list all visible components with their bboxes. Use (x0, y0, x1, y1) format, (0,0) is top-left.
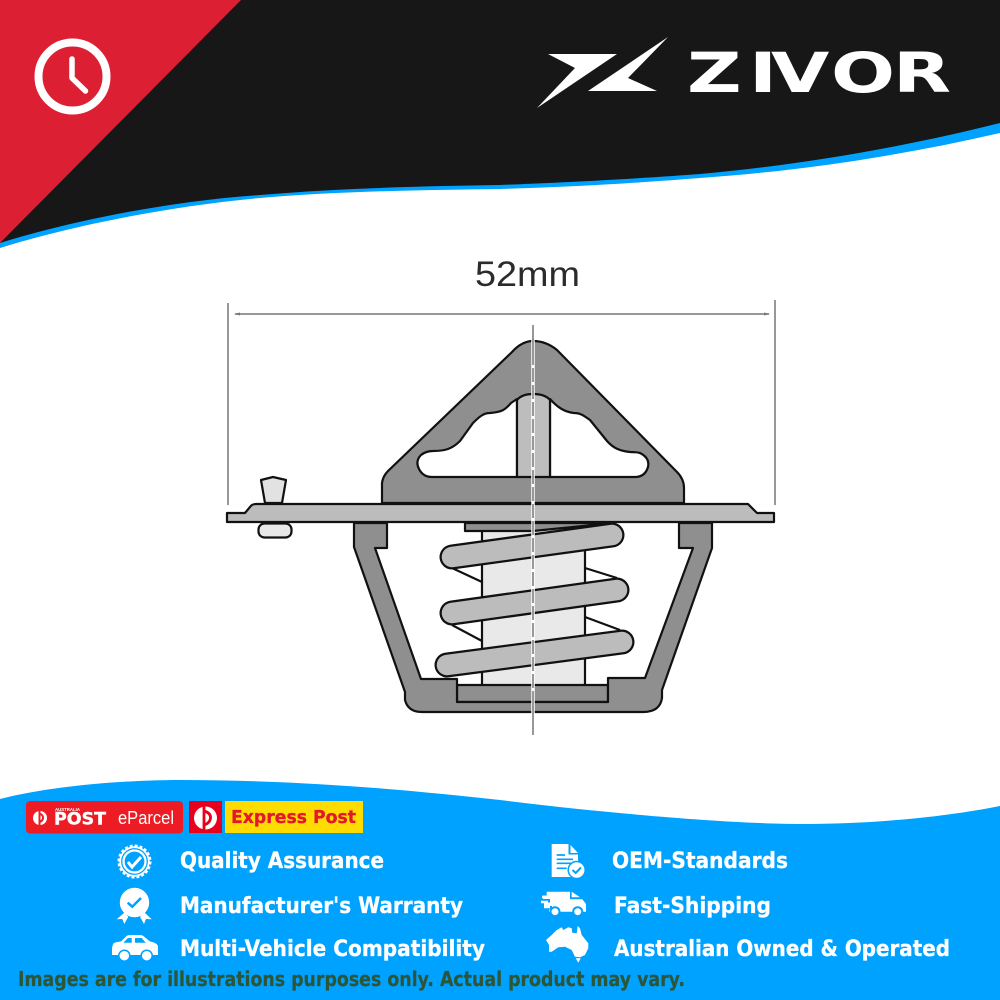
thermostat cup (354, 523, 712, 712)
badge: Australia Post eParcel (26, 801, 183, 834)
bottom plate (457, 685, 608, 702)
logo wordmark: ZIVOR (687, 41, 951, 105)
label: Manufacturer's Warranty: Manufacturer's Warranty (180, 894, 463, 919)
icon: Australia map (546, 926, 588, 963)
thermostat stem (517, 394, 550, 477)
label: OEM-Standards: OEM-Standards (612, 849, 788, 874)
spring back lines (452, 568, 620, 641)
icon: warranty ribbon (117, 888, 152, 924)
badge: Express Post (189, 801, 363, 833)
piston (482, 528, 585, 686)
icon: quality badge (118, 846, 150, 878)
dimension: 52mm (228, 255, 775, 505)
thermostat bridge (382, 341, 684, 503)
piston cap (465, 523, 613, 531)
dimension label: 52mm (475, 255, 580, 294)
badge: Australia Post eParcel: eParcel (118, 807, 174, 828)
label: Australian Owned & Operated: Australian Owned & Operated (614, 937, 950, 962)
rivet bottom (258, 524, 292, 538)
badge: Express Post: Express Post (231, 807, 356, 828)
logo mark (537, 37, 668, 108)
logo: ZIVOR (537, 37, 951, 108)
icon: car (112, 935, 158, 961)
spring coils (447, 535, 622, 665)
post logo (33, 811, 47, 825)
icon: delivery truck (541, 892, 586, 916)
icon: document check (552, 844, 585, 878)
red corner triangle (0, 0, 241, 243)
label: Quality Assurance: Quality Assurance (180, 849, 384, 874)
diagram: thermostat cross-section (227, 341, 774, 712)
label: Fast-Shipping: Fast-Shipping (614, 894, 771, 919)
disclaimer: Images are for illustrations purposes only. Actual product may vary. (18, 967, 685, 991)
label: Multi-Vehicle Compatibility: Multi-Vehicle Compatibility (180, 937, 485, 962)
rivet top (261, 477, 286, 503)
icon: clock (38, 42, 106, 110)
centre line (531, 325, 535, 735)
badge: Australia Post eParcel: AUSTRALIA (55, 807, 81, 812)
footer: blue band (0, 780, 1000, 1000)
header: black banner with blue edge (0, 0, 1000, 248)
thermostat flange (227, 504, 774, 522)
badge: Australia Post eParcel: POST (54, 810, 107, 828)
